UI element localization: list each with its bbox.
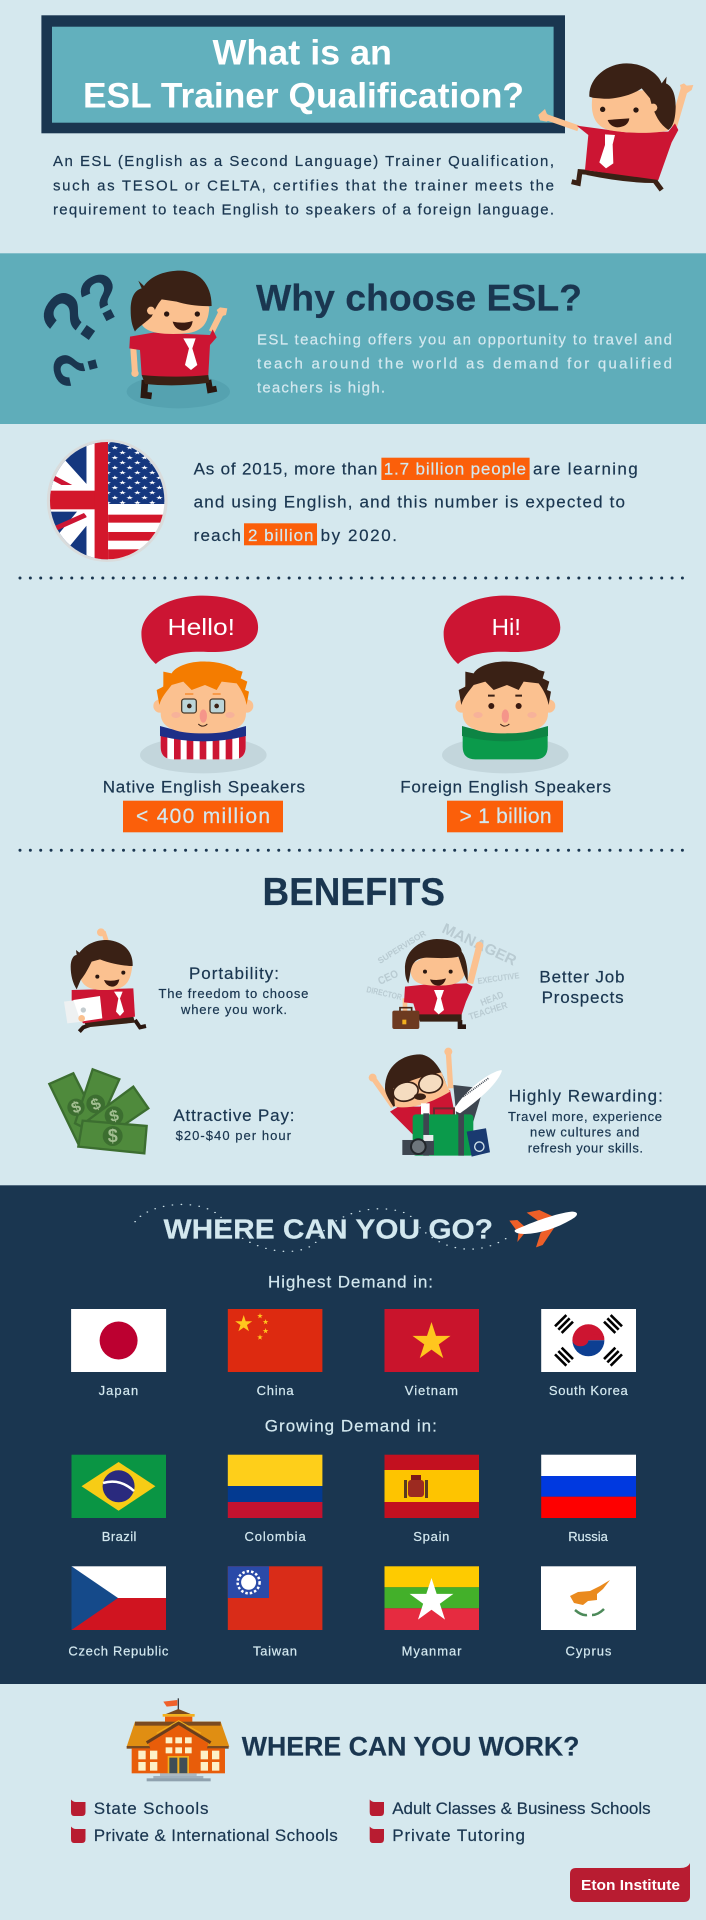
title box: ESL Trainer Qualification? bbox=[83, 76, 524, 116]
heading: benefits: BENEFITS bbox=[262, 871, 445, 914]
speech bubble: hi: Hi! bbox=[492, 614, 521, 640]
icon: money bills: $ bbox=[108, 1126, 118, 1146]
heading: where can you go: WHERE CAN YOU GO? bbox=[164, 1213, 493, 1244]
text: attractive pay: $20-$40 per hour bbox=[176, 1128, 292, 1143]
illustration: traveller with luggage bbox=[369, 1048, 502, 1157]
country names: growing row two: Taiwan bbox=[253, 1643, 297, 1658]
text: why paragraph: ESL teaching offers you an opportunity to travel and bbox=[257, 332, 672, 349]
panel: native speakers bbox=[103, 596, 305, 832]
character: thinking trainer bbox=[127, 271, 230, 408]
highlight: 1.7 billion people: 1.7 billion people bbox=[384, 459, 526, 478]
text: why paragraph bbox=[257, 332, 672, 397]
label: native English speakers: Native English Speakers bbox=[103, 778, 305, 797]
icon: question marks: ? bbox=[67, 256, 136, 340]
text: highly rewarding: Highly Rewarding: bbox=[509, 1086, 663, 1105]
word cloud: job titles: MANAGER bbox=[439, 920, 519, 970]
flag: Vietnam bbox=[384, 1309, 479, 1372]
character: trainer with paper bbox=[64, 928, 146, 1032]
word cloud: job titles bbox=[366, 920, 520, 1023]
country names: growing row two bbox=[68, 1643, 612, 1658]
word cloud: job titles: DIRECTOR bbox=[366, 984, 403, 1002]
text: highly rewarding: refresh your skills. bbox=[528, 1140, 643, 1155]
text: highly rewarding: new cultures and bbox=[530, 1125, 639, 1140]
text: billions of learners: As of 2015, more than bbox=[194, 459, 377, 478]
callout: less than 400 million: < 400 million bbox=[136, 805, 270, 828]
logo: Eton Institute: Eton Institute bbox=[581, 1877, 680, 1894]
flag: Japan bbox=[71, 1309, 166, 1372]
icon: money bills: $ bbox=[69, 1098, 84, 1117]
text: better job prospects: Better Job bbox=[539, 968, 624, 987]
callout: more than 1 billion: > 1 billion bbox=[460, 805, 552, 828]
text: billions of learners: and using English, and this number is expected to bbox=[194, 493, 625, 512]
text: attractive pay bbox=[173, 1106, 294, 1143]
icon: question marks bbox=[21, 256, 136, 395]
heading: why choose ESL: Why choose ESL? bbox=[256, 278, 582, 319]
icon: question marks: ? bbox=[38, 340, 115, 395]
heading: where can you work: WHERE CAN YOU WORK? bbox=[242, 1732, 580, 1762]
word cloud: job titles: CEO bbox=[376, 968, 401, 988]
icon: money bills: $ bbox=[108, 1107, 121, 1126]
text: why paragraph: teachers is high. bbox=[257, 380, 385, 397]
benefit: attractive pay bbox=[49, 1069, 295, 1153]
list item: private tutoring: Private Tutoring bbox=[392, 1826, 525, 1845]
text: billions of learners: reach bbox=[194, 526, 241, 545]
country names: highest demand: China bbox=[257, 1383, 294, 1398]
flag: Brazil bbox=[72, 1455, 166, 1518]
subheading: growing demand: Growing Demand in: bbox=[265, 1417, 437, 1436]
text: portability: The freedom to choose bbox=[158, 986, 308, 1001]
text: attractive pay: Attractive Pay: bbox=[173, 1106, 294, 1125]
flag: Cyprus bbox=[541, 1566, 636, 1630]
icon: plane bbox=[509, 1210, 577, 1247]
country names: highest demand: South Korea bbox=[549, 1383, 628, 1398]
word cloud: job titles: SUPERVISOR bbox=[376, 928, 428, 966]
list item: private and international schools: Private & International Schools bbox=[94, 1826, 338, 1845]
panel: where can you go bbox=[0, 1185, 706, 1684]
country names: growing row one bbox=[102, 1529, 609, 1544]
country names: growing row one: Russia bbox=[568, 1529, 609, 1544]
country names: growing row two: Cyprus bbox=[566, 1643, 612, 1658]
text: highly rewarding: Travel more, experience bbox=[508, 1109, 662, 1124]
title box: What is an bbox=[212, 34, 392, 72]
text: portability: Portability: bbox=[189, 964, 279, 983]
highlight: 2 billion: 2 billion bbox=[248, 526, 314, 545]
flag: Myanmar bbox=[384, 1566, 479, 1630]
country names: growing row two: Czech Republic bbox=[68, 1643, 169, 1658]
text: portability bbox=[158, 964, 308, 1017]
character: native speaker head bbox=[140, 662, 267, 773]
country names: growing row one: Brazil bbox=[102, 1529, 137, 1544]
intro paragraph: such as TESOL or CELTA, certifies that the trainer meets the bbox=[53, 177, 554, 194]
text: billions of learners: are learning bbox=[533, 459, 638, 478]
text: why paragraph: teach around the world as demand for qualified bbox=[257, 356, 672, 373]
flag: Taiwan bbox=[228, 1566, 322, 1630]
flag: South Korea bbox=[541, 1309, 636, 1372]
title box bbox=[41, 15, 565, 133]
flag: China bbox=[228, 1309, 322, 1372]
text: better job prospects: Prospects bbox=[542, 988, 624, 1007]
country names: growing row one: Colombia bbox=[244, 1529, 306, 1544]
flag: Spain bbox=[384, 1455, 479, 1518]
list item: state schools: State Schools bbox=[94, 1799, 208, 1818]
intro paragraph: requirement to teach English to speakers of a foreign language. bbox=[53, 202, 554, 219]
text: billions of learners: by 2020. bbox=[321, 526, 397, 545]
speech bubble: hi bbox=[444, 596, 560, 664]
icon: UK and US flag globe bbox=[45, 439, 168, 563]
country names: highest demand: Japan bbox=[99, 1383, 138, 1398]
character: pointing trainer bbox=[538, 63, 693, 190]
icon: money bills bbox=[49, 1069, 148, 1153]
icon: question marks: ? bbox=[21, 274, 121, 363]
word cloud: job titles: HEAD bbox=[479, 990, 505, 1009]
flag: Russia bbox=[541, 1455, 636, 1518]
callout: more than 1 billion bbox=[447, 801, 563, 832]
speech bubble: hello bbox=[141, 596, 258, 664]
intro paragraph bbox=[53, 153, 554, 219]
speech bubble: hello: Hello! bbox=[168, 614, 235, 640]
text: better job prospects bbox=[539, 968, 624, 1007]
panel: where can you work bbox=[71, 1698, 651, 1845]
list item: adult classes and business schools: Adult Classes & Business Schools bbox=[392, 1799, 651, 1818]
word cloud: job titles: EXECUTIVE bbox=[477, 970, 520, 986]
word cloud: job titles: TEACHER bbox=[468, 1000, 509, 1023]
country names: growing row two: Myanmar bbox=[402, 1643, 462, 1658]
text: portability: where you work. bbox=[180, 1002, 287, 1017]
text: highly rewarding bbox=[508, 1086, 663, 1155]
country names: highest demand bbox=[99, 1383, 628, 1398]
subheading: highest demand: Highest Demand in: bbox=[268, 1273, 433, 1292]
character: foreign speaker head bbox=[442, 662, 569, 773]
text: billions of learners bbox=[194, 458, 638, 545]
panel: why choose ESL bbox=[0, 253, 706, 424]
panel: foreign speakers bbox=[400, 596, 611, 832]
flight path bbox=[135, 1204, 509, 1251]
benefit: highly rewarding bbox=[369, 1048, 663, 1157]
country names: growing row one: Spain bbox=[413, 1529, 449, 1544]
benefit: better job prospects bbox=[366, 920, 624, 1029]
logo: Eton Institute bbox=[570, 1863, 690, 1902]
character: trainer with briefcase bbox=[392, 939, 483, 1029]
country names: highest demand: Vietnam bbox=[405, 1383, 458, 1398]
intro paragraph: An ESL (English as a Second Language) Trainer Qualification, bbox=[53, 153, 554, 170]
flag: Czech Republic bbox=[72, 1566, 166, 1630]
callout: less than 400 million bbox=[123, 801, 283, 832]
benefit: portability bbox=[64, 928, 308, 1032]
icon: money bills: $ bbox=[88, 1095, 104, 1114]
icon: school building bbox=[127, 1698, 229, 1781]
label: foreign English speakers: Foreign English Speakers bbox=[400, 778, 611, 797]
flag: Colombia bbox=[228, 1455, 322, 1518]
